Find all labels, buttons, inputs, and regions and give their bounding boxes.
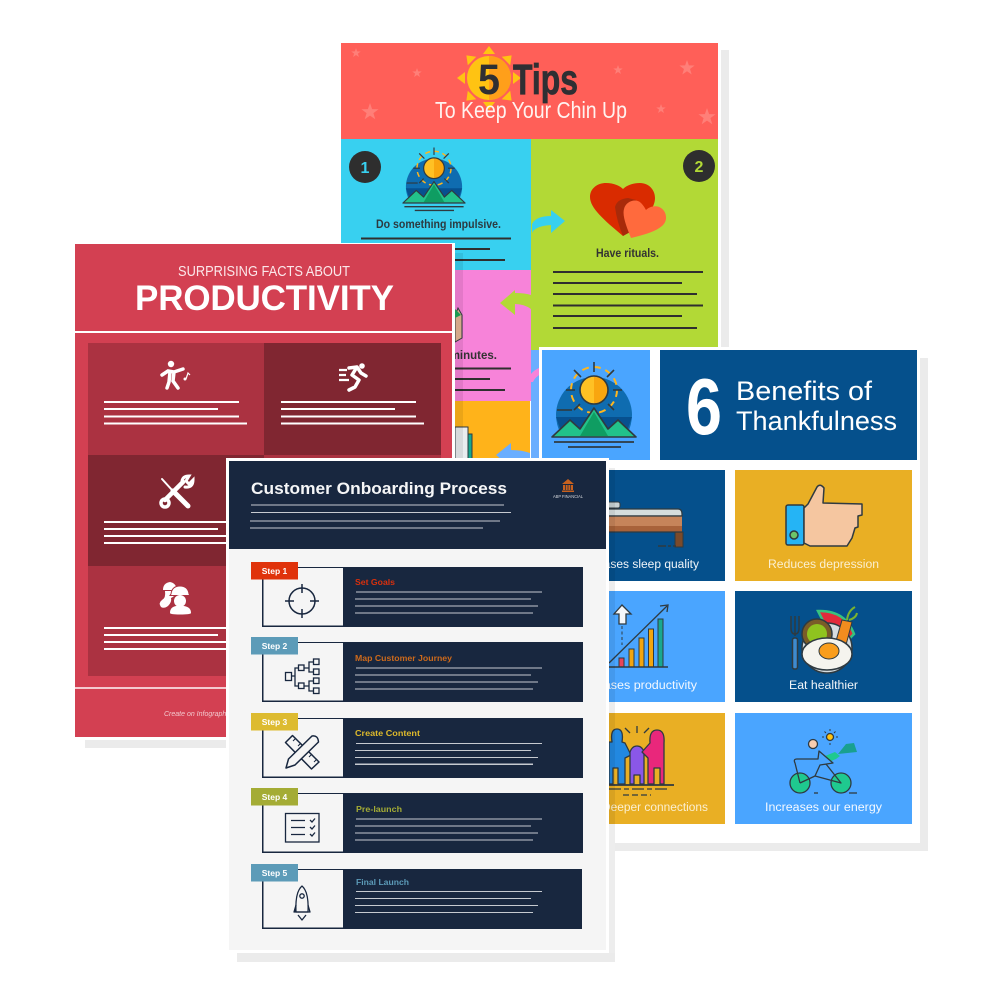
header tile xyxy=(660,350,917,460)
step 1: Set Goals xyxy=(355,578,396,587)
header tile: Thankfulness xyxy=(736,406,897,436)
step 5: Step 5 xyxy=(262,868,288,878)
benefit: sleep xyxy=(548,470,725,581)
icon: food bowl xyxy=(791,607,857,673)
benefit: productivity xyxy=(548,591,725,702)
benefit: connections: Deeper connections xyxy=(602,802,708,814)
icon: hearts xyxy=(590,183,666,238)
icon: bed xyxy=(596,502,683,547)
panel: customer onboarding poster xyxy=(226,458,615,962)
footer credit: Create on Infographics xyxy=(164,711,235,718)
tip 4 cell xyxy=(341,401,530,460)
step 4 xyxy=(251,788,583,853)
logo xyxy=(553,479,583,499)
step 4: Pre-launch xyxy=(356,805,402,814)
step 5 xyxy=(251,864,582,929)
icon: sun badge xyxy=(457,46,521,110)
icon: flowchart xyxy=(286,659,319,694)
fact cell 2 xyxy=(264,343,441,455)
icon: family xyxy=(609,726,674,795)
tip 1 cell: Do something impulsive. xyxy=(376,219,501,231)
header tile: Benefits of xyxy=(736,376,873,406)
fact cell 1 xyxy=(88,343,264,455)
icon: ruler and pencil xyxy=(286,736,319,769)
header band xyxy=(341,43,718,139)
benefit: productivity: Increases productivity xyxy=(576,680,697,692)
benefit: depression: Reduces depression xyxy=(768,559,879,571)
step 1 xyxy=(251,562,583,627)
tip 2 cell: Have rituals. xyxy=(596,248,659,260)
icon: tools xyxy=(161,476,193,507)
header band xyxy=(229,461,606,549)
arrow: blue to green xyxy=(532,210,565,233)
icon: runner xyxy=(339,363,366,390)
heading: PRODUCTIVITY xyxy=(135,279,394,318)
tip 1 cell: 1 xyxy=(361,160,370,177)
panel: productivity poster xyxy=(72,243,463,748)
icon: thumbs up xyxy=(786,485,862,546)
arrow: green to pink xyxy=(500,290,531,315)
benefit: energy xyxy=(735,713,912,824)
panel: 6 benefits poster xyxy=(539,347,928,851)
step 2 xyxy=(251,637,583,702)
icon: cyclist xyxy=(790,729,857,793)
benefit: energy: Increases our energy xyxy=(765,802,882,814)
tip 5 cell xyxy=(531,350,541,460)
step 2: Map Customer Journey xyxy=(355,654,453,663)
logo: ABP FINANCIAL xyxy=(553,494,583,499)
step 2: Step 2 xyxy=(262,641,288,651)
benefit: depression xyxy=(735,470,912,581)
benefit: eat healthier xyxy=(735,591,912,702)
benefit: sleep: Increases sleep quality xyxy=(577,559,699,571)
title: 5 Tips: 5 xyxy=(478,56,500,104)
fact cell 4 xyxy=(88,566,264,676)
header tile: 6 xyxy=(686,362,722,451)
icon: workers xyxy=(160,582,191,614)
arrow: blue on orange xyxy=(496,443,530,460)
icon: rising bar chart xyxy=(609,605,668,667)
step 4: Step 4 xyxy=(262,792,288,802)
icon: dancer xyxy=(162,361,190,388)
benefit: connections xyxy=(548,713,725,824)
title: 5 Tips xyxy=(478,56,578,104)
step 3 xyxy=(251,713,583,778)
heading: SURPRISING FACTS ABOUT xyxy=(178,264,350,280)
tip 2 cell xyxy=(531,139,718,350)
step 3: Create Content xyxy=(355,729,420,738)
icon: target xyxy=(285,584,319,618)
tip 3 cell xyxy=(341,270,531,401)
sun tile xyxy=(542,350,650,460)
step 5: Final Launch xyxy=(356,878,409,887)
fact cell 3 xyxy=(88,455,264,566)
step 1: Step 1 xyxy=(262,566,288,576)
step 3: Step 3 xyxy=(262,717,288,727)
title: 5 Tips: Tips xyxy=(513,56,578,104)
tip 1 cell xyxy=(341,139,531,270)
tip 2 cell: 2 xyxy=(695,159,704,176)
arrow: pink to blue xyxy=(531,367,541,382)
subtitle: To Keep Your Chin Up xyxy=(435,97,627,123)
icon: rocket xyxy=(294,886,310,920)
benefit: eat healthier: Eat healthier xyxy=(789,680,858,692)
panel: 5 tips poster xyxy=(341,43,729,460)
header band: Customer Onboarding Process xyxy=(251,479,507,498)
icon: checklist xyxy=(286,814,319,842)
tip 3 cell: minutes. xyxy=(450,350,497,362)
